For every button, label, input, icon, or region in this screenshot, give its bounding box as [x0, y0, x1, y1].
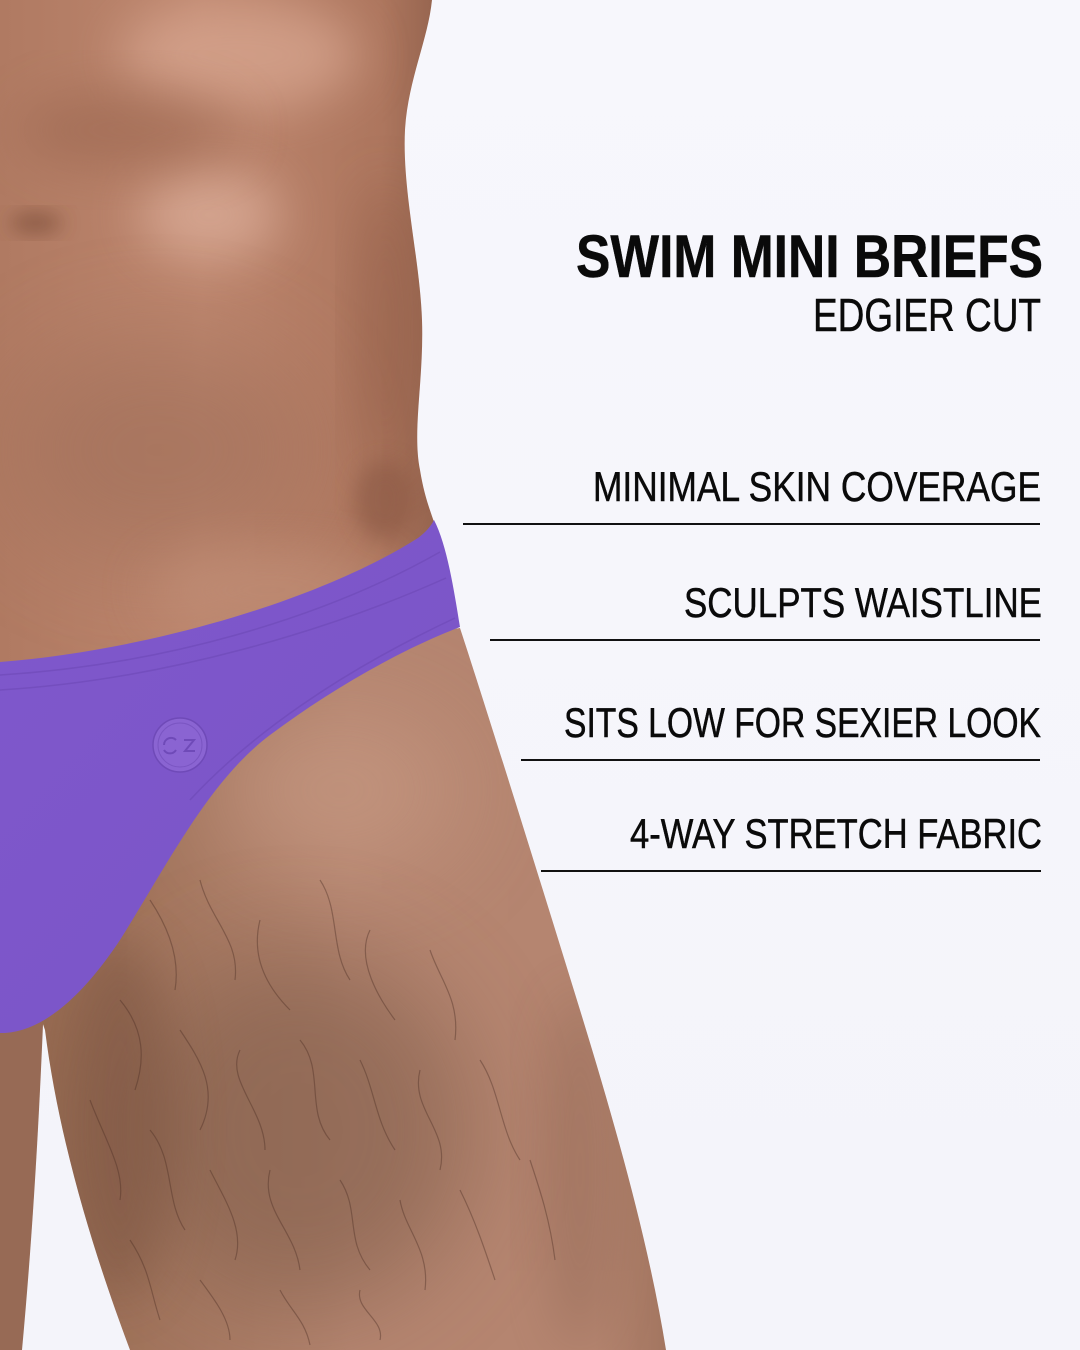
swim briefs [0, 520, 460, 1033]
logo badge [153, 718, 207, 772]
torso [0, 0, 434, 662]
photo: model wearing swim briefs [0, 0, 700, 1350]
left thigh [0, 1000, 44, 1350]
right thigh [43, 628, 666, 1350]
leg hair texture [90, 880, 555, 1345]
navel [10, 214, 62, 232]
